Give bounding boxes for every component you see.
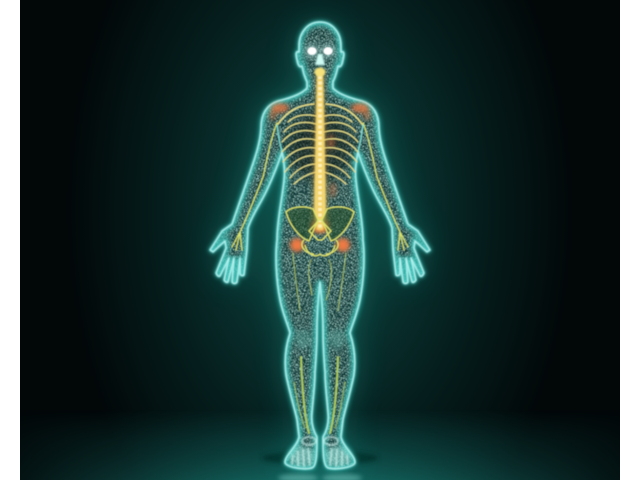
feet: bright fill, toes and tendons [289,437,351,467]
body silhouette with speckled tissue [211,22,429,468]
body halo [210,22,430,469]
body outline glow [210,22,430,469]
chest sides: armpit to ribcage [277,124,363,152]
spine [312,72,328,232]
orange hot spots: shoulders and hips [269,103,371,252]
pelvis [286,207,354,256]
figure: body with skeleton and nerves [200,10,440,480]
knee caps [295,329,345,349]
nerves: arms and legs [232,123,408,433]
floor: glowing reflective surface [20,420,620,480]
skeleton: ribs and clavicles [278,104,362,184]
face: eyes, nose and mouth [305,44,335,76]
